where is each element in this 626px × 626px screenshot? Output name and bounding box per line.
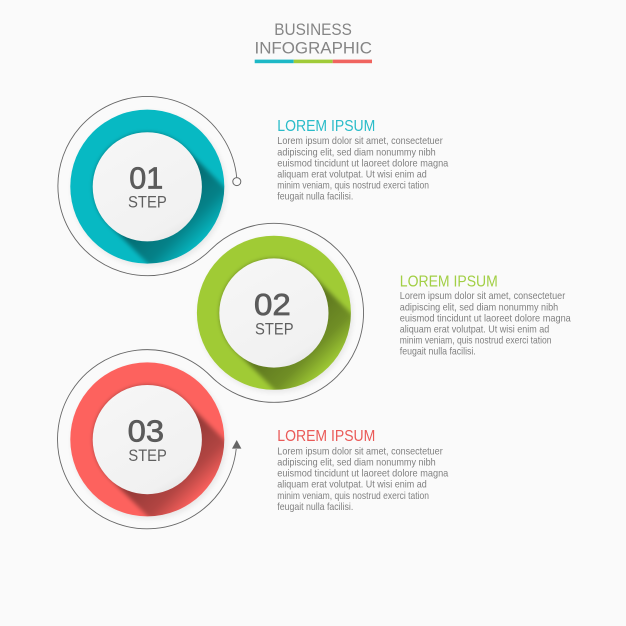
connector line through the three steps: [58, 96, 364, 529]
body: step 1: minim veniam, quis nostrud exerci tation: [277, 181, 429, 192]
body: step 2: adipiscing elit, sed diam nonummy nibh: [400, 302, 558, 313]
step 1 badge: [70, 110, 226, 266]
body: step 3: minim veniam, quis nostrud exerci tation: [277, 491, 429, 502]
heading: step 1: LOREM IPSUM: [277, 118, 375, 135]
body: step 2: aliquam erat volutpat. Ut wisi enim ad: [400, 324, 549, 336]
start marker circle: [233, 178, 241, 186]
body: step 3: [277, 446, 448, 513]
body: step 3: adipiscing elit, sed diam nonummy nibh: [277, 458, 436, 468]
step 3 number: 03: [128, 414, 164, 449]
body: step 1: [277, 136, 448, 203]
body: step 2: euismod tincidunt ut laoreet dolore magna: [400, 313, 571, 324]
heading: step 2: LOREM IPSUM: [400, 273, 498, 290]
title: [254, 21, 372, 63]
step 2 badge: [197, 236, 353, 392]
body: step 1: adipiscing elit, sed diam nonummy nibh: [277, 147, 436, 158]
title: INFOGRAPHIC: [254, 39, 372, 57]
arrow head: [232, 440, 241, 449]
step 3 badge: [70, 362, 226, 519]
step 3 label: STEP: [128, 446, 167, 465]
step 1 number: 01: [129, 160, 163, 195]
body: step 3: Lorem ipsum dolor sit amet, consectetuer: [277, 446, 443, 457]
body: step 2: Lorem ipsum dolor sit amet, consectetuer: [400, 291, 566, 302]
step 1 label: STEP: [128, 193, 167, 212]
title underline bar: [255, 60, 372, 63]
body: step 2: [400, 291, 571, 358]
body: step 3: feugait nulla facilisi.: [277, 502, 353, 513]
title: BUSINESS: [274, 21, 352, 39]
body: step 2: feugait nulla facilisi.: [400, 347, 476, 358]
body: step 3: euismod tincidunt ut laoreet dolore magna: [277, 469, 448, 480]
body: step 1: Lorem ipsum dolor sit amet, consectetuer: [277, 136, 443, 147]
body: step 1: aliquam erat volutpat. Ut wisi enim ad: [277, 170, 427, 180]
step 2 number: 02: [254, 287, 291, 322]
text block: step 1: [277, 118, 448, 203]
text block: step 2: [400, 273, 571, 358]
body: step 3: aliquam erat volutpat. Ut wisi enim ad: [277, 480, 427, 491]
body: step 1: euismod tincidunt ut laoreet dolore magna: [277, 158, 448, 169]
body: step 1: feugait nulla facilisi.: [277, 192, 353, 203]
heading: step 3: LOREM IPSUM: [277, 428, 375, 445]
body: step 2: minim veniam, quis nostrud exerci tation: [400, 336, 552, 347]
text block: step 3: [277, 428, 448, 513]
step 2 label: STEP: [255, 319, 294, 338]
